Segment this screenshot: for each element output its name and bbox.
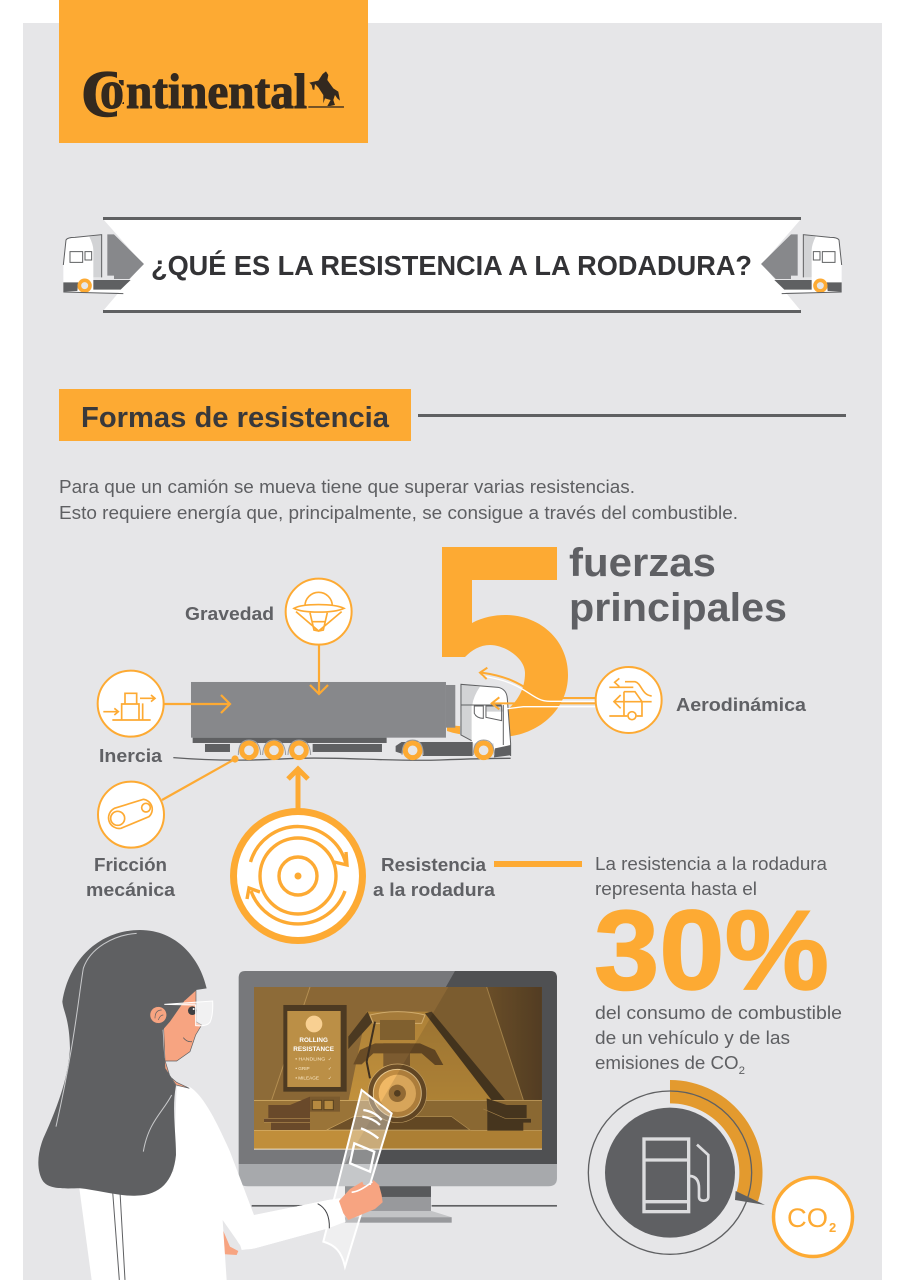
hair highlights	[56, 933, 172, 1152]
info board: ✓	[328, 1057, 332, 1062]
callout: 30 percent text: La resistencia a la rodadura	[595, 854, 828, 874]
intro text: Esto requiere energía que, principalmente, se consigue a través del combustible.	[59, 503, 738, 523]
label: Aerodinamica: Aerodinámica	[676, 694, 807, 715]
info board: RESISTANCE	[293, 1046, 334, 1053]
fuel and CO2 gauge	[588, 1080, 765, 1254]
tested tyre	[368, 1064, 427, 1123]
heading: 5 fuerzas principales: principales	[569, 586, 787, 630]
info board: ✓	[328, 1066, 332, 1071]
friction contact point	[231, 755, 239, 763]
label: Friccion mecanica: mecánica	[86, 879, 176, 900]
Continental logo: ntinental	[126, 63, 307, 119]
label: Gravedad: Gravedad	[185, 603, 274, 624]
icon: gravedad parachute	[286, 579, 352, 645]
arm and hand	[235, 1180, 383, 1250]
CO2 badge: CO	[787, 1203, 828, 1233]
icon: resistencia a la rodadura wheel	[234, 812, 362, 940]
truck illustration	[173, 682, 511, 760]
lab coat	[79, 1087, 345, 1280]
transparent tablet	[323, 1090, 392, 1267]
callout: 30 percent text: emisiones de CO	[595, 1053, 733, 1073]
aerodynamic flow arrows	[480, 668, 595, 709]
label: Inercia: Inercia	[99, 745, 163, 766]
screen: rolling resistance test rig	[254, 987, 542, 1149]
Continental logo: C	[81, 58, 129, 131]
stand	[252, 1185, 557, 1223]
Continental logo: o	[100, 60, 124, 120]
intro text: Para que un camión se mueva tiene que superar varias resistencias.	[59, 477, 635, 497]
icon: aerodinamica vehicle	[596, 667, 662, 733]
icon: fuel pump	[644, 1139, 708, 1212]
CO2 badge	[774, 1178, 852, 1256]
intro text	[59, 477, 738, 523]
info board: ROLLING	[299, 1037, 328, 1044]
Continental logo: o	[100, 60, 124, 120]
left truck icon	[63, 234, 144, 294]
info board: ✓	[328, 1075, 332, 1080]
heading: 5 fuerzas principales: fuerzas	[569, 541, 716, 585]
info board: • MILEAGE	[295, 1075, 319, 1080]
label: Resistencia a la rodadura	[373, 854, 582, 900]
Continental logo	[84, 71, 344, 118]
woman scientist	[38, 930, 345, 1280]
neck	[164, 1058, 189, 1088]
info board: • HANDLING	[295, 1057, 326, 1062]
logo block	[59, 0, 368, 143]
big number 5	[442, 547, 568, 737]
arrows to truck	[162, 645, 328, 800]
trailer	[191, 682, 455, 738]
orange 30% arc	[670, 1080, 763, 1201]
label: Resistencia a la rodadura: a la rodadura	[373, 879, 496, 900]
monitor	[239, 971, 557, 1223]
CO2 badge: 2	[829, 1220, 836, 1235]
safety glasses	[164, 1001, 213, 1026]
wheels	[242, 743, 491, 758]
icon: friccion mecanica belt	[98, 782, 164, 848]
back hand	[223, 1231, 238, 1255]
callout: 30 percent text: del consumo de combustible	[595, 1003, 842, 1023]
section heading: Formas de resistencia: Formas de resistencia	[81, 402, 390, 434]
ear	[150, 1007, 167, 1023]
label: Friccion mecanica: Fricción	[94, 854, 167, 875]
heading: 5 fuerzas principales	[569, 541, 787, 630]
info board: • GRIP	[295, 1066, 310, 1071]
callout: 30 percent text: representa hasta el	[595, 879, 757, 899]
hair	[38, 930, 207, 1196]
section heading: Formas de resistencia	[59, 389, 846, 441]
title text: ¿QUÉ ES LA RESISTENCIA A LA RODADURA?	[151, 250, 752, 281]
face	[163, 990, 202, 1061]
info board	[283, 1005, 347, 1092]
big 30%: 30%	[594, 887, 829, 1013]
callout: 30 percent text: 2	[739, 1065, 745, 1077]
callout: 30 percent text	[594, 854, 842, 1077]
label: Friccion mecanica	[86, 854, 176, 900]
callout: 30 percent text: de un vehículo y de las	[595, 1028, 790, 1048]
label: Resistencia a la rodadura: Resistencia	[381, 854, 487, 875]
up arrow to tyre contact	[288, 769, 308, 810]
title ribbon	[63, 217, 842, 313]
right truck icon	[761, 234, 842, 294]
icon: inercia boxes	[98, 671, 164, 737]
